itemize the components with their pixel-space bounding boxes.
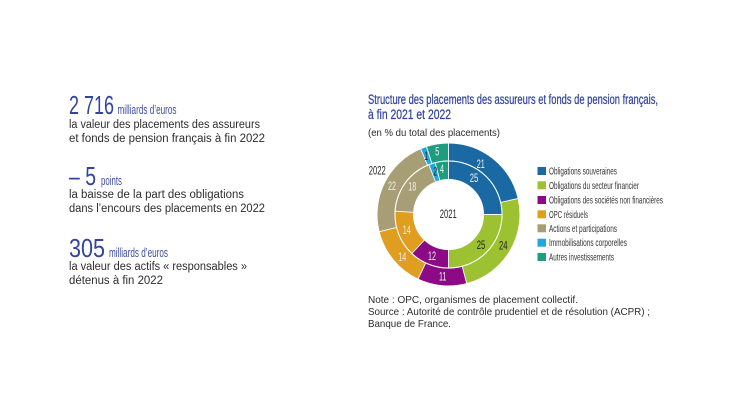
heading: chart title [368, 92, 658, 122]
data labels: 25 [477, 240, 485, 252]
key figure: 2 716 billion: la valeur des placements des assureurs [69, 119, 260, 131]
data labels: 21 [477, 159, 485, 171]
source note: Note : OPC, organismes de placement collectif. [368, 294, 578, 306]
data labels: 2 [433, 166, 437, 178]
key figure: minus 5 points: la baisse de la part des obligations [69, 189, 244, 201]
donut chart [369, 143, 518, 284]
data labels: 24 [499, 240, 508, 252]
legend item: Immobilisations corporelles: Immobilisations corporelles [549, 237, 627, 249]
legend item: Obligations du secteur financier: Obligations du secteur financier [549, 180, 639, 192]
label: 2022: 2022 [369, 166, 386, 178]
key figure: 305 billion [69, 235, 247, 287]
key figure: 305 billion: 305 [69, 235, 105, 263]
data labels: 18 [408, 182, 416, 194]
data labels: 11 [439, 272, 446, 284]
source note [368, 294, 650, 330]
key figure: 2 716 billion: 2 716 [69, 92, 114, 120]
key figure: minus 5 points: – 5 [69, 163, 96, 191]
chart subtitle: (en % du total des placements) [368, 127, 500, 139]
key figure: 305 billion: détenus à fin 2022 [69, 275, 163, 287]
data labels: 22 [388, 181, 396, 193]
key figure: minus 5 points [69, 163, 265, 215]
source note: Banque de France. [368, 318, 451, 330]
data labels: 1 [425, 151, 428, 163]
data labels: 25 [470, 173, 478, 185]
data labels: 12 [428, 251, 436, 263]
heading: chart title: à fin 2021 et 2022 [368, 107, 451, 122]
key figure: 2 716 billion: et fonds de pension français à fin 2022 [69, 133, 265, 145]
data labels: 14 [398, 252, 407, 264]
inner ring: 2021 [404, 170, 493, 259]
legend item: Autres investissements: Autres investissements [549, 252, 614, 264]
panel: key figures [69, 92, 265, 287]
legend item: Actions et participations: Actions et participations [549, 223, 617, 235]
outer ring: 2022 [386, 152, 511, 277]
key figure: 2 716 billion: milliards d’euros [118, 102, 177, 117]
key figure: 2 716 billion [69, 92, 265, 145]
data labels: 14 [403, 225, 411, 237]
legend [538, 166, 663, 264]
data labels: 4 [440, 164, 444, 176]
legend item: Obligations souveraines: Obligations souveraines [549, 166, 617, 178]
key figure: 305 billion: milliards d’euros [109, 245, 168, 260]
key figure: minus 5 points: points [101, 173, 122, 188]
legend item: OPC résiduels: OPC résiduels [549, 209, 588, 221]
key figure: minus 5 points: dans l’encours des placements en 2022 [69, 203, 265, 215]
label: 2021: 2021 [440, 209, 457, 221]
source note: Source : Autorité de contrôle prudentiel et de résolution (ACPR) ; [368, 306, 650, 318]
key figure: 305 billion: la valeur des actifs « responsables » [69, 261, 247, 273]
data labels: 5 [435, 146, 439, 158]
data labels [388, 146, 508, 284]
